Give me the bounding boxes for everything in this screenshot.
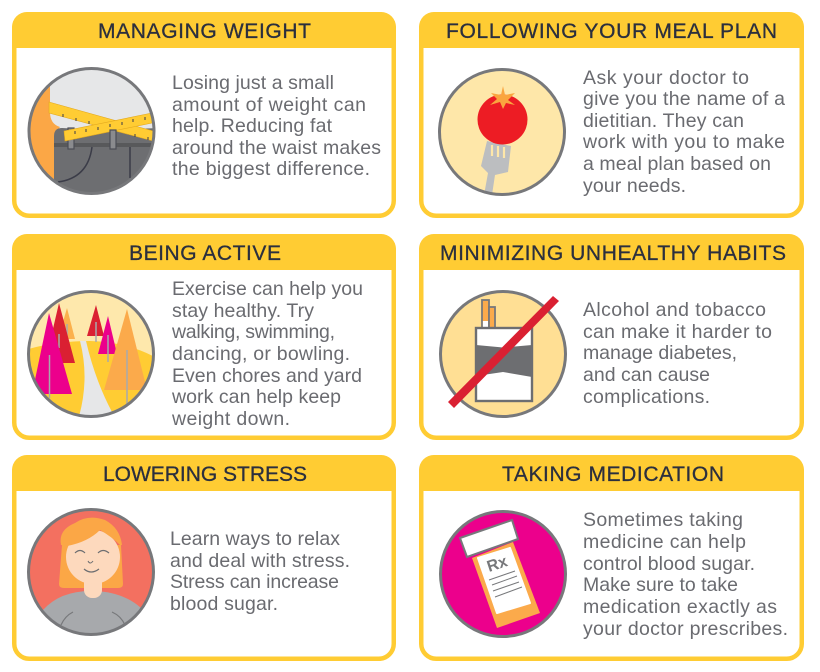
text: lowering stress (170, 528, 350, 615)
text: managing weight: Losing just a small (172, 72, 334, 94)
icon: smiling woman (27, 508, 155, 636)
text: taking medication: your doctor prescribes. (583, 618, 788, 640)
icon: forest path (27, 290, 155, 418)
text: being active: weight down. (171, 408, 290, 430)
heading: minimizing unhealthy habits (419, 234, 804, 270)
panel: following your meal plan (419, 12, 804, 216)
text: taking medication: control blood sugar. (583, 553, 755, 575)
text: taking medication: Sometimes taking (583, 509, 743, 531)
text: following your meal plan: work with you to make (582, 131, 785, 153)
text: following your meal plan (582, 67, 785, 197)
icon: prescription bottle (440, 512, 566, 636)
icon: prescription bottle: Rx (485, 553, 510, 576)
heading: managing weight: MANAGING WEIGHT (98, 20, 311, 43)
text: minimizing unhealthy habits: can make it harder to (583, 321, 772, 343)
text: taking medication: medication exactly as (583, 596, 777, 618)
text: taking medication: Make sure to take (583, 574, 738, 596)
icon: crossed-out cigarettes (440, 292, 566, 416)
text: minimizing unhealthy habits: Alcohol and tobacco (583, 299, 766, 321)
icon: tomato on a fork (440, 70, 564, 195)
text: taking medication: medicine can help (583, 531, 746, 553)
text: following your meal plan: dietitian. They can (583, 110, 744, 132)
text: managing weight: help. Reducing fat (172, 115, 333, 137)
panel: managing weight (12, 12, 396, 216)
panel: being active (12, 234, 396, 438)
heading: taking medication: TAKING MEDICATION (502, 463, 724, 486)
text: taking medication (583, 509, 788, 640)
heading: following your meal plan (419, 12, 804, 48)
text: managing weight: amount of weight can (172, 94, 366, 116)
heading: minimizing unhealthy habits: MINIMIZING UNHEALTHY HABITS (440, 242, 786, 265)
text: following your meal plan: give you the name of a (583, 88, 785, 110)
heading: lowering stress (12, 455, 396, 491)
text: minimizing unhealthy habits (583, 299, 772, 408)
text: minimizing unhealthy habits: and can cause (583, 364, 710, 386)
panel: lowering stress (12, 455, 396, 659)
text: minimizing unhealthy habits: complications. (583, 386, 710, 408)
panel: taking medication (419, 455, 804, 659)
text: managing weight (172, 72, 381, 180)
text: lowering stress: Stress can increase (170, 571, 339, 593)
text: following your meal plan: your needs. (583, 175, 686, 197)
panel: minimizing unhealthy habits (419, 234, 804, 438)
text: being active: Even chores and yard (172, 365, 362, 387)
text: following your meal plan: Ask your doctor to (583, 67, 749, 89)
text: lowering stress: Learn ways to relax (170, 528, 340, 550)
heading: taking medication (419, 455, 804, 491)
heading: being active: BEING ACTIVE (129, 242, 281, 265)
icon: waist with measuring tape (28, 67, 156, 195)
text: following your meal plan: a meal plan based on (583, 153, 771, 175)
heading: being active (12, 234, 396, 270)
text: managing weight: around the waist makes (172, 137, 381, 159)
heading: lowering stress: LOWERING STRESS (103, 463, 307, 486)
heading: managing weight (12, 12, 396, 48)
text: being active: dancing, or bowling. (172, 343, 350, 365)
text: lowering stress: blood sugar. (170, 593, 278, 615)
text: being active: stay healthy. Try (172, 300, 314, 322)
text: being active (171, 278, 363, 430)
text: minimizing unhealthy habits: manage diabetes, (583, 342, 737, 364)
text: being active: walking, swimming, (171, 321, 335, 343)
heading: following your meal plan: FOLLOWING YOUR MEAL PLAN (446, 20, 777, 43)
text: being active: work can help keep (171, 386, 341, 408)
text: being active: Exercise can help you (172, 278, 363, 300)
text: managing weight: the biggest difference. (172, 158, 370, 180)
text: lowering stress: and deal with stress. (170, 550, 350, 572)
